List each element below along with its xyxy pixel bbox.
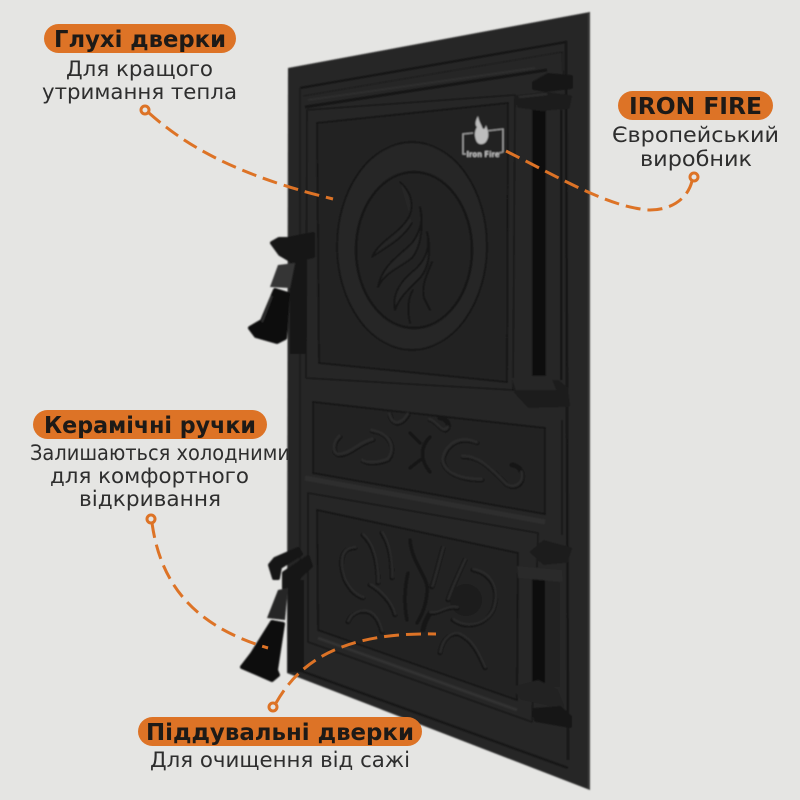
description: solid doors [42, 57, 237, 104]
right light edge [588, 13, 590, 789]
heading: solid doors: Глухі дверки [54, 27, 226, 53]
inner circle [356, 172, 472, 328]
leader line: ash doors [269, 634, 436, 711]
floral relief highlight [342, 532, 496, 667]
textured disc [450, 584, 482, 616]
scroll ornament highlight [334, 414, 522, 486]
leader line: ceramic handles [147, 515, 268, 648]
pill: brand [618, 91, 773, 120]
description: ceramic handles: Залишаються холодними [30, 441, 290, 465]
description: solid doors: утримання тепла [42, 80, 237, 104]
upper right hinge rail [512, 75, 571, 406]
description: ceramic handles: відкривання [79, 487, 221, 511]
upper handle [250, 234, 313, 354]
pill: ash doors [138, 717, 422, 746]
outer circle [337, 142, 487, 350]
description: ash doors: Для очищення від сажі [150, 748, 410, 772]
callout: ash doors [138, 717, 422, 772]
description: brand [612, 123, 779, 171]
leader line: solid doors [141, 106, 333, 199]
description: solid doors: Для кращого [66, 57, 213, 81]
logo: Iron Fire: Iron Fire [466, 150, 500, 159]
heading: ash doors: Піддувальні дверки [146, 720, 414, 746]
scroll ornament [334, 415, 522, 487]
upper door leaf [306, 95, 515, 390]
lower right hinges [515, 542, 570, 726]
top hinges [534, 75, 571, 90]
callout: brand [612, 91, 779, 171]
callout: ceramic handles [30, 410, 290, 511]
description: brand: виробник [640, 147, 752, 171]
description: brand: Європейський [612, 123, 779, 147]
pill: ceramic handles [33, 410, 267, 439]
lower handle [242, 549, 311, 680]
leader line: brand [506, 151, 698, 210]
pill: solid doors [44, 24, 236, 53]
door outer frame [287, 12, 590, 790]
description: ceramic handles [30, 441, 290, 511]
description: ceramic handles: для комфортного [50, 464, 249, 488]
floral relief [342, 533, 496, 668]
upper inner panel [317, 103, 508, 382]
lower door leaf [308, 493, 538, 722]
flame relief [372, 182, 432, 323]
logo: Iron Fire [463, 116, 503, 159]
frame relief lines [293, 42, 568, 768]
heading: brand: IRON FIRE [629, 94, 762, 120]
cast iron door [242, 12, 590, 790]
callout: solid doors [42, 24, 237, 104]
heading: ceramic handles: Керамічні ручки [44, 413, 256, 439]
lower inner panel [317, 510, 518, 700]
middle decorative panel [305, 402, 545, 522]
